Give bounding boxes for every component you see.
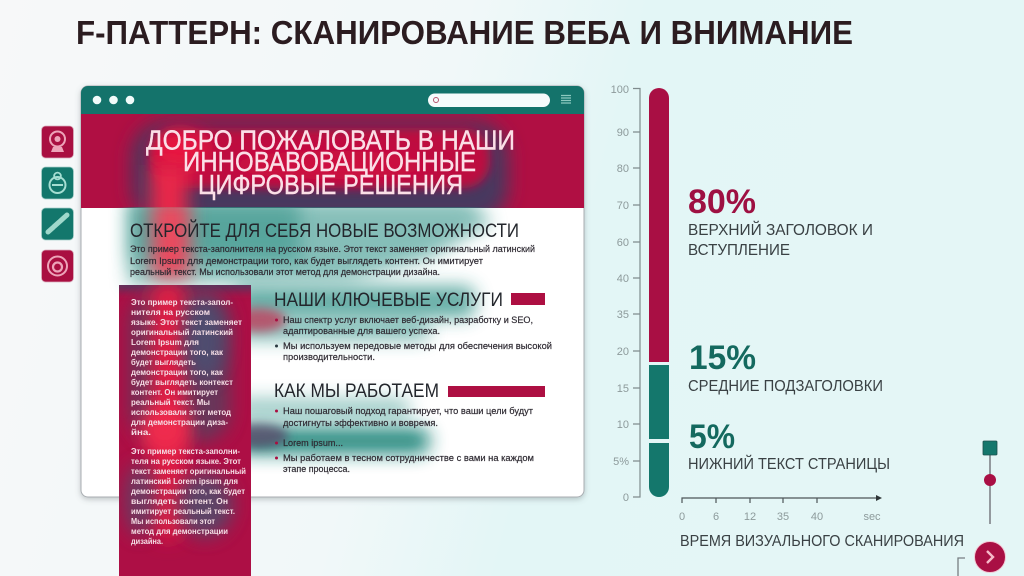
sidebar text: языке. Этот текст заменяет (131, 317, 242, 327)
title: F-ПАТТЕРН: СКАНИРОВАНИЕ ВЕБА И ВНИМАНИЕ (76, 14, 853, 51)
time axis: 12 (744, 511, 756, 523)
stat: 80%: 80% (688, 183, 756, 221)
services bullets (275, 315, 552, 362)
stat: 80%: ВСТУПЛЕНИЕ (688, 242, 790, 259)
heatmap: hero (132, 122, 508, 225)
sidebar text: выглядеть контент. Он (131, 496, 228, 506)
time axis: 35 (777, 511, 789, 523)
sidebar text: демонстрации того, как будет (131, 486, 245, 496)
sidebar text: будет выглядеть (131, 357, 196, 367)
stat: 15%: 15% (689, 339, 756, 377)
stat: 15% (688, 339, 883, 395)
sidebar text: текст заменяет оригинальный (131, 466, 246, 476)
process bullets: Наш пошаговый подход гарантирует, что ваши цели будут (283, 406, 533, 416)
intro paragraph: реальный текст. Мы использовали этот метод для демонстрации дизайна. (130, 267, 440, 277)
intro paragraph: Это пример текста-заполнителя на русском языке. Этот текст заменяет оригинальный латинский (130, 244, 535, 254)
sidebar text: Lorem Ipsum для (131, 337, 199, 347)
scale axis: 10 (617, 419, 629, 431)
sidebar text: дизайна. (131, 536, 163, 546)
scale axis: 90 (617, 127, 629, 139)
services accent bar (511, 293, 545, 305)
time axis (679, 495, 882, 523)
services bullets: производительности. (283, 352, 375, 362)
icon: ring target (42, 250, 74, 282)
slider control (983, 441, 997, 524)
time axis: 6 (713, 511, 719, 523)
services bullets: адаптированные для вашего успеха. (283, 326, 440, 336)
process bullets: Lorem ipsum... (283, 438, 343, 448)
process bullets: достигнуты эффективно и вовремя. (283, 418, 438, 428)
window body (81, 86, 584, 497)
sidebar text: демонстрации того, как (131, 347, 224, 357)
sidebar text: нителя на русском (131, 307, 210, 317)
sidebar text (131, 297, 246, 546)
sidebar text: для демонстрации диза- (131, 417, 228, 427)
stat: 80% (688, 183, 873, 259)
icon: gear figure (42, 167, 74, 199)
scale axis: 20 (617, 346, 629, 358)
icon: crystal ball (42, 126, 74, 158)
scale axis: 35 (617, 309, 629, 321)
sidebar text: контент. Он имитирует (131, 387, 218, 397)
sidebar text: йна. (131, 427, 151, 437)
icon column (42, 126, 74, 282)
stat: 5%: 5% (689, 418, 735, 456)
sidebar text: Это пример текста-заполни- (131, 446, 240, 456)
hero heading: ДОБРО ПОЖАЛОВАТЬ В НАШИ (146, 124, 515, 156)
time axis: 0 (679, 511, 685, 523)
sidebar text: использовали этот метод (131, 407, 231, 417)
services bullets: Наш спектр услуг включает веб-дизайн, разработку и SEO, (283, 315, 533, 325)
axis caption: ВРЕМЯ ВИЗУАЛЬНОГО СКАНИРОВАНИЯ (680, 533, 964, 550)
scale axis: 15 (617, 383, 629, 395)
intro paragraph: Lorem Ipsum для демонстрации того, как будет выглядеть контент. Он имитирует (130, 256, 483, 266)
sidebar text: метод для демонстрации (131, 526, 228, 536)
sidebar text: Мы использовали этот (131, 516, 215, 526)
time axis: sec (863, 511, 881, 523)
services section (274, 289, 552, 362)
hero heading: ЦИФРОВЫЕ РЕШЕНИЯ (198, 169, 463, 200)
process bullets: Мы работаем в тесном сотрудничестве с вами на каждом (283, 453, 534, 463)
scale axis: 60 (617, 237, 629, 249)
scale axis: 0 (623, 492, 629, 504)
process accent bar (448, 386, 545, 397)
attention scale (611, 84, 669, 504)
services heading: НАШИ КЛЮЧЕВЫЕ УСЛУГИ (274, 289, 503, 311)
stat: 80%: ВЕРХНИЙ ЗАГОЛОВОК И (688, 220, 873, 239)
services bullets: Мы используем передовые методы для обеспечения высокой (283, 341, 552, 351)
sidebar text: латинский Lorem ipsum для (131, 476, 238, 486)
process heading: КАК МЫ РАБОТАЕМ (274, 380, 439, 402)
scale axis: 40 (617, 273, 629, 285)
browser window (81, 86, 584, 497)
sidebar text: реальный текст. Мы (131, 397, 210, 407)
time axis: 40 (811, 511, 823, 523)
attention bar (649, 88, 669, 497)
heatmap: sidebar (112, 278, 258, 540)
browser title bar (81, 86, 584, 114)
stat: 15%: СРЕДНИЕ ПОДЗАГОЛОВКИ (688, 378, 883, 395)
stat: 5% (688, 418, 890, 473)
heatmap: content area (128, 200, 492, 454)
scale axis (611, 84, 640, 504)
sidebar text: будет выглядеть контекст (131, 377, 233, 387)
scale axis: 70 (617, 200, 629, 212)
sidebar panel with heatmap (119, 285, 251, 576)
sidebar text: демонстрации того, как (131, 367, 224, 377)
sidebar text: теля на русском языке. Этот (131, 456, 241, 466)
stat: 5%: НИЖНИЙ ТЕКСТ СТРАНИЦЫ (688, 454, 890, 473)
process bullets (275, 406, 534, 474)
hero heading: ИННОВАВОВАЦИОННЫЕ (183, 146, 476, 177)
sidebar text: оригинальный латинский (131, 327, 233, 337)
sidebar text: имитирует реальный текст. (131, 506, 235, 516)
next button (958, 542, 1006, 576)
scale axis: 5% (613, 456, 629, 468)
hero heading (146, 124, 515, 200)
hero banner with heatmap (81, 114, 584, 208)
icon: link chain (42, 208, 74, 240)
intro paragraph (130, 244, 535, 277)
scale axis: 80 (617, 163, 629, 175)
process bullets: этапе процесса. (283, 464, 350, 474)
sidebar text: Это пример текста-запол- (131, 297, 233, 307)
intro subheading: ОТКРОЙТЕ ДЛЯ СЕБЯ НОВЫЕ ВОЗМОЖНОСТИ (130, 218, 519, 242)
scale axis: 100 (611, 84, 629, 96)
process section (274, 380, 545, 474)
